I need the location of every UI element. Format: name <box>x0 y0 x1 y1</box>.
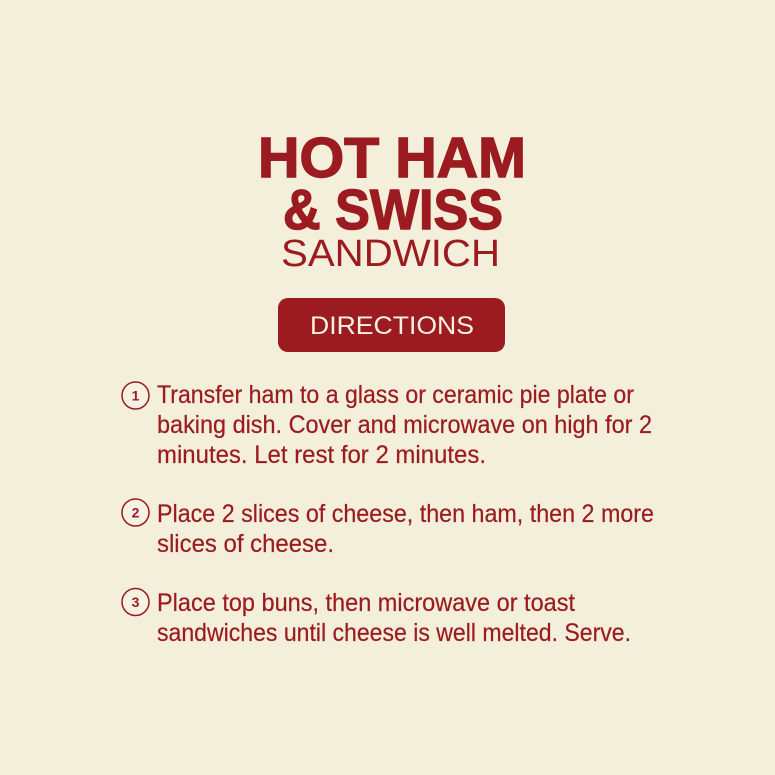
step 3 <box>122 588 631 647</box>
step 3 text <box>157 589 631 647</box>
step 1 text <box>157 381 652 469</box>
directions badge <box>278 298 505 352</box>
step 1 text: Transfer ham to a glass or ceramic pie plate or <box>157 381 634 409</box>
step 2 <box>122 499 654 558</box>
icon: step number 2 <box>122 499 149 526</box>
step 1 text: minutes. Let rest for 2 minutes. <box>157 441 486 469</box>
title: & SWISS <box>283 178 503 242</box>
step 1 <box>122 381 652 469</box>
icon: step number 3: 3 <box>132 594 140 610</box>
step 3 text: sandwiches until cheese is well melted. Serve. <box>157 619 631 647</box>
title <box>258 126 526 275</box>
step 2 text: slices of cheese. <box>157 530 334 558</box>
icon: step number 1 <box>122 382 149 409</box>
step 1 text: baking dish. Cover and microwave on high for 2 <box>157 411 652 439</box>
step 2 text: Place 2 slices of cheese, then ham, then 2 more <box>157 500 654 528</box>
step 3 text: Place top buns, then microwave or toast <box>157 589 575 617</box>
title: HOT HAM <box>258 126 526 190</box>
icon: step number 2: 2 <box>132 504 140 520</box>
step 2 text <box>157 500 654 558</box>
icon: step number 1: 1 <box>132 388 140 404</box>
directions badge: DIRECTIONS <box>310 312 474 340</box>
icon: step number 3 <box>122 588 149 616</box>
title: SANDWICH <box>281 233 500 275</box>
